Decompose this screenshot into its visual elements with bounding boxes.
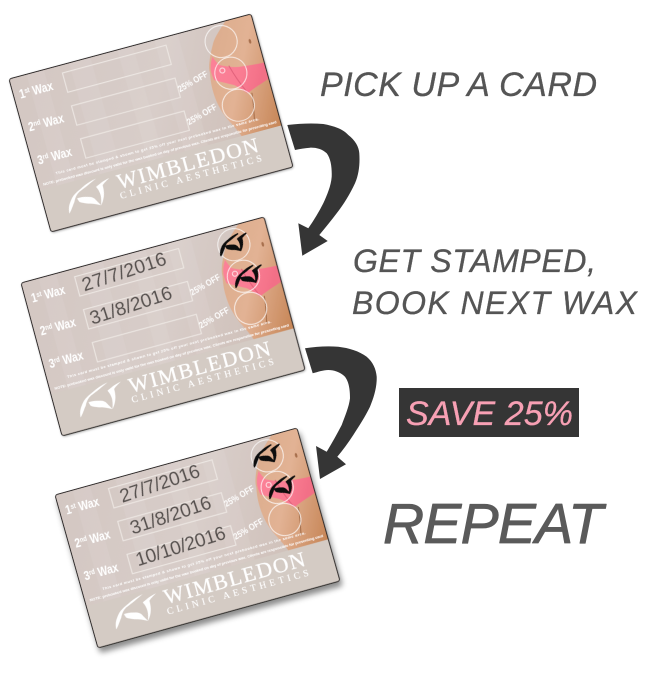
callout: save 25%: SAVE 25%	[406, 395, 573, 433]
discount labels: 25% OFF	[231, 516, 265, 542]
step text: pick up a card: PICK UP A CARD	[320, 66, 597, 104]
fine print: This card must be stamped & shown to get 25% off your next prebooked wax in the same area.	[55, 116, 260, 175]
row labels: Wax	[51, 316, 78, 335]
logo wordmark: CLINIC AESTHETICS	[130, 357, 275, 406]
fine print: This card must be stamped & shown to get 25% off your next prebooked wax in the same area.	[102, 530, 306, 591]
icon: stamp two	[265, 474, 299, 499]
card outline	[9, 14, 293, 232]
fine print: NOTE: prebooked wax discount is only valid for the wax booked on day of previous wax. Clients are responsible for presenting card	[42, 119, 278, 187]
discount labels: 25% OFF	[188, 272, 222, 298]
guide circles	[201, 22, 259, 125]
row labels: 2	[27, 121, 36, 135]
logo mark	[74, 379, 127, 418]
photo: body in pink bikini	[222, 218, 294, 340]
guide circles	[214, 225, 272, 328]
row labels: Wax	[29, 80, 55, 99]
row labels: nd	[79, 535, 88, 544]
card outline	[55, 428, 340, 648]
card background	[21, 217, 305, 436]
photo: body in pink bikini	[255, 428, 328, 550]
stamp boxes	[75, 249, 201, 362]
card outline	[21, 217, 305, 436]
logo wordmark: WIMBLEDON	[114, 133, 261, 194]
bottom band	[51, 328, 305, 436]
fine print: This card must be stamped & shown to get 25% off your next prebooked wax in the same area.	[66, 319, 272, 379]
stamp boxes	[108, 460, 236, 574]
row labels: 2	[39, 325, 48, 339]
stamp boxes	[62, 45, 189, 158]
discount labels: 25% OFF	[185, 101, 219, 127]
row labels: rd	[88, 568, 96, 577]
row labels: 3	[83, 570, 92, 584]
discount labels: 25% OFF	[176, 68, 210, 94]
row labels: 1	[64, 504, 73, 518]
row labels: Wax	[75, 496, 101, 515]
logo wordmark: CLINIC AESTHETICS	[119, 154, 263, 202]
date: third wax: 10/10/2016	[133, 523, 229, 571]
discount labels	[220, 482, 268, 543]
card background	[55, 428, 340, 648]
icon: stamp one	[250, 443, 283, 467]
bottom band	[40, 125, 293, 232]
row labels: Wax	[59, 350, 86, 369]
step text: repeat: REPEAT	[383, 492, 607, 556]
logo wordmark: CLINIC AESTHETICS	[166, 568, 310, 617]
row labels: nd	[33, 119, 42, 128]
row labels: rd	[53, 356, 61, 365]
row labels: Wax	[41, 284, 67, 303]
card 1: blank loyalty card	[8, 12, 295, 232]
bottom band	[86, 539, 340, 648]
row labels: st	[70, 502, 77, 511]
row labels: Wax	[94, 562, 121, 581]
row labels: Wax	[39, 113, 66, 132]
logo wordmark: WIMBLEDON	[126, 336, 273, 398]
discount labels	[173, 68, 221, 128]
step text: get stamped, book next wax: GET STAMPED,	[353, 243, 596, 279]
row labels: st	[24, 87, 31, 95]
fine print: NOTE: prebooked wax discount is only valid for the wax booked on day of previous wax. Clients are responsible for presenting card	[89, 533, 324, 603]
card background	[9, 14, 293, 232]
date: second wax: 31/8/2016	[87, 283, 175, 330]
row labels	[18, 80, 75, 168]
arrow: card 1 to card 2	[287, 123, 360, 256]
guide circles	[247, 436, 306, 539]
row labels	[64, 495, 122, 584]
row labels: rd	[42, 152, 49, 161]
logo mark	[62, 175, 116, 214]
row labels: 3	[36, 154, 45, 168]
discount labels: 25% OFF	[222, 483, 256, 509]
photo: body in pink bikini	[209, 14, 282, 136]
row labels: nd	[44, 323, 53, 332]
arrow: card 2 to card 3	[305, 346, 377, 479]
discount labels	[186, 271, 233, 331]
logo wordmark: WIMBLEDON	[161, 547, 308, 609]
icon: stamp one	[217, 232, 250, 256]
row labels: 1	[18, 88, 27, 102]
logo mark	[109, 591, 163, 630]
date: first wax: 27/7/2016	[117, 461, 203, 508]
discount labels: 25% OFF	[197, 304, 231, 330]
row labels: st	[36, 291, 43, 299]
row labels: 1	[30, 292, 39, 306]
row labels: Wax	[47, 146, 74, 165]
row labels	[30, 284, 87, 372]
step text: get stamped, book next wax: BOOK NEXT WAX	[352, 285, 639, 321]
fine print: NOTE: prebooked wax discount is only valid for the wax booked on day of previous wax. Clients are responsible for presenting card	[54, 322, 290, 391]
row labels: 3	[48, 358, 57, 372]
card 2: two dates stamped	[20, 215, 307, 436]
icon: stamp two	[232, 263, 265, 287]
card 3: three dates stamped	[54, 426, 342, 648]
step text: get stamped, book next wax	[352, 243, 639, 321]
date: second wax: 31/8/2016	[127, 493, 214, 539]
date: first wax: 27/7/2016	[79, 249, 169, 296]
row labels: Wax	[86, 528, 113, 547]
row labels: 2	[73, 537, 82, 551]
